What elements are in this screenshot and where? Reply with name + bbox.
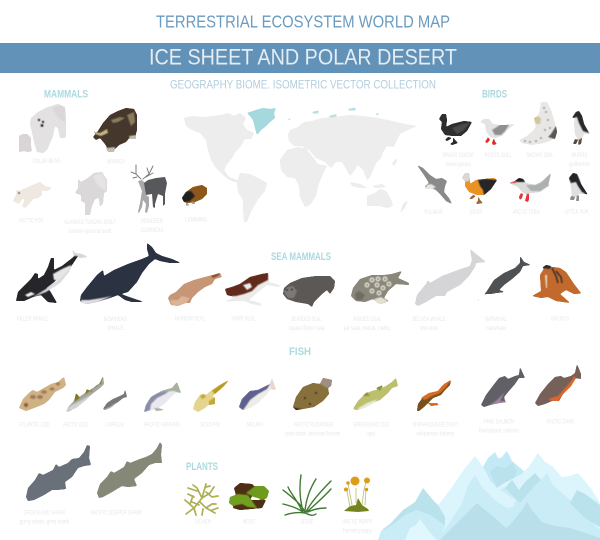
icon: greenland cod (353, 378, 398, 410)
icon: eider (462, 173, 497, 204)
icon: reindeer (131, 165, 167, 213)
label (104, 316, 127, 332)
label: PACIFIC SLEEPER SHARK (91, 510, 142, 516)
label: RINGED SEAL (354, 316, 382, 323)
label: BRANT GOOSE (443, 152, 474, 159)
label: SNOWY OWL (526, 152, 554, 159)
label (569, 152, 590, 168)
label: POLAR BEAR (33, 158, 60, 165)
label: (CARIBOU) (140, 227, 164, 234)
label: WHALE (108, 325, 124, 332)
label: barren-ground wolf (69, 228, 111, 235)
icon: bearded seal (283, 276, 335, 307)
label: GREENLAND SHARK (24, 510, 66, 516)
label: HARBOR SEAL (175, 316, 205, 322)
icon: capelin (103, 389, 127, 410)
label (20, 510, 70, 526)
icon: nelma (239, 378, 276, 410)
icon: brant goose (439, 114, 472, 145)
icon: pacific sleeper shark (97, 442, 162, 498)
icon: snowy owl (519, 102, 557, 145)
label: LITTLE AUK (564, 208, 589, 216)
label: guillemot (569, 161, 590, 168)
icon: arctic char (535, 364, 581, 406)
label: jar seal, netsik, nattiq (343, 325, 390, 332)
label: ROSS'S GULL (484, 152, 512, 159)
label (140, 218, 164, 234)
icon: pacific herring (144, 382, 181, 412)
label (353, 422, 389, 438)
label: MUSKOX (107, 158, 125, 166)
icon: beluga whale (415, 249, 486, 306)
Greenland (247, 108, 276, 135)
label: BOWHEAD (104, 316, 127, 323)
label (479, 418, 519, 434)
icon: bowhead whale (80, 243, 181, 304)
icon: arctic flounder (293, 378, 332, 410)
icon: lemming (182, 185, 207, 206)
label: HARP SEAL (232, 316, 256, 322)
icon: arctic fox (13, 182, 52, 208)
label: gurry shark, grey shark (20, 518, 70, 526)
label (343, 316, 390, 332)
icon: narwhal (475, 256, 531, 304)
title: TERRESTRIAL ECOSYSTEM WORLD MAP (156, 12, 450, 32)
label: ARCTIC COD (63, 422, 88, 428)
label: ATLANTIC COD (19, 422, 50, 428)
label: SCULPIN (200, 422, 220, 428)
label: ARCTIC TERN (512, 209, 540, 216)
North America (184, 113, 254, 182)
label: EIDER (470, 209, 483, 216)
Australia (367, 189, 393, 208)
Islands (350, 182, 368, 188)
label: ARCTIC FOX (18, 218, 44, 224)
label: polar plaice, christmas flounder (286, 430, 341, 438)
label: GREENLAND COD (353, 422, 389, 428)
banner (0, 43, 600, 73)
label: MURRE (572, 152, 588, 159)
heading: sea mammals: SEA MAMMALS (271, 251, 331, 263)
label: SEDGE (300, 518, 314, 526)
icon: ross's gull (480, 119, 515, 145)
illustration: ice mountains (378, 451, 600, 540)
icon: muskox (92, 108, 137, 152)
label: MOSS (243, 518, 255, 526)
label (342, 518, 373, 534)
label: BELUGA WHALE (412, 316, 446, 323)
icon: viviparous eelpout (417, 380, 451, 411)
label: KILLER WHALE (17, 316, 48, 322)
icon: walrus (532, 265, 587, 303)
subtitle: GEOGRAPHY BIOME. ISOMETRIC VECTOR COLLECTION (170, 78, 436, 92)
icon: moss (229, 483, 269, 510)
icon: arctic cod (66, 376, 104, 412)
label: VIVIPAROUS EELPOUT (412, 422, 459, 428)
label: BEARDED SEAL (292, 316, 322, 323)
icon: alaskan tundra wolf (75, 172, 107, 215)
icon: little auk (569, 173, 588, 201)
icon: sculpin (193, 380, 229, 412)
icon: harbor seal (168, 273, 222, 306)
label: REINDEER (141, 218, 163, 225)
icon: fulmar (417, 165, 452, 204)
banner: ICE SHEET AND POLAR DESERT (149, 44, 457, 70)
icon: murre (572, 111, 590, 145)
label (64, 219, 116, 235)
label: LICHEN (195, 518, 211, 526)
label: narwhale (486, 325, 506, 332)
label: white whale (419, 325, 438, 332)
label: PACIFIC HERRING (144, 422, 180, 428)
label: NELMA (246, 422, 263, 428)
icon: killer whale (16, 249, 88, 303)
icon: atlantic cod (19, 377, 66, 411)
label (288, 316, 325, 332)
label: WALRUS (551, 316, 569, 322)
label: ARCTIC POPPY (342, 518, 373, 526)
label: ARCTIC CHAR (546, 418, 574, 426)
icon: arctic tern (509, 173, 558, 202)
icon: lichen (185, 484, 218, 515)
heading: plants: PLANTS (186, 461, 218, 473)
label (412, 316, 446, 332)
icon: arctic poppy (344, 476, 370, 512)
label: NARWHAL (485, 316, 507, 323)
label: CAPELIN (106, 422, 124, 428)
label (443, 152, 474, 168)
label: square flipper seal (288, 325, 325, 332)
label: ARCTIC FLOUNDER (294, 422, 333, 428)
label (412, 422, 459, 438)
label: horned poppy (343, 528, 373, 534)
label: ogac (366, 430, 376, 438)
label: ALASKAN TUNDRA WOLF (64, 219, 116, 226)
label (286, 422, 341, 438)
icon: greenland shark (26, 445, 91, 501)
icon: harp seal (224, 273, 280, 306)
label (485, 316, 507, 332)
label: brent goose (446, 161, 471, 168)
Africa (280, 147, 327, 207)
heading: fish: FISH (289, 346, 311, 358)
label: viviparous blenny (416, 430, 455, 438)
heading: mammals: MAMMALS (44, 88, 88, 100)
South America (237, 173, 267, 222)
label: PINK SALMON (484, 418, 514, 426)
label: humpback salmon (479, 428, 519, 434)
icon: sedge (283, 475, 331, 515)
world map (184, 108, 417, 222)
Eurasia (288, 115, 417, 180)
label: FULMAR (424, 209, 443, 216)
label: LEMMING (185, 216, 207, 224)
icon: ringed seal (351, 271, 409, 304)
icon: pink salmon (481, 367, 525, 407)
heading: birds: BIRDS (482, 88, 507, 100)
icon: polar bear (19, 104, 66, 153)
